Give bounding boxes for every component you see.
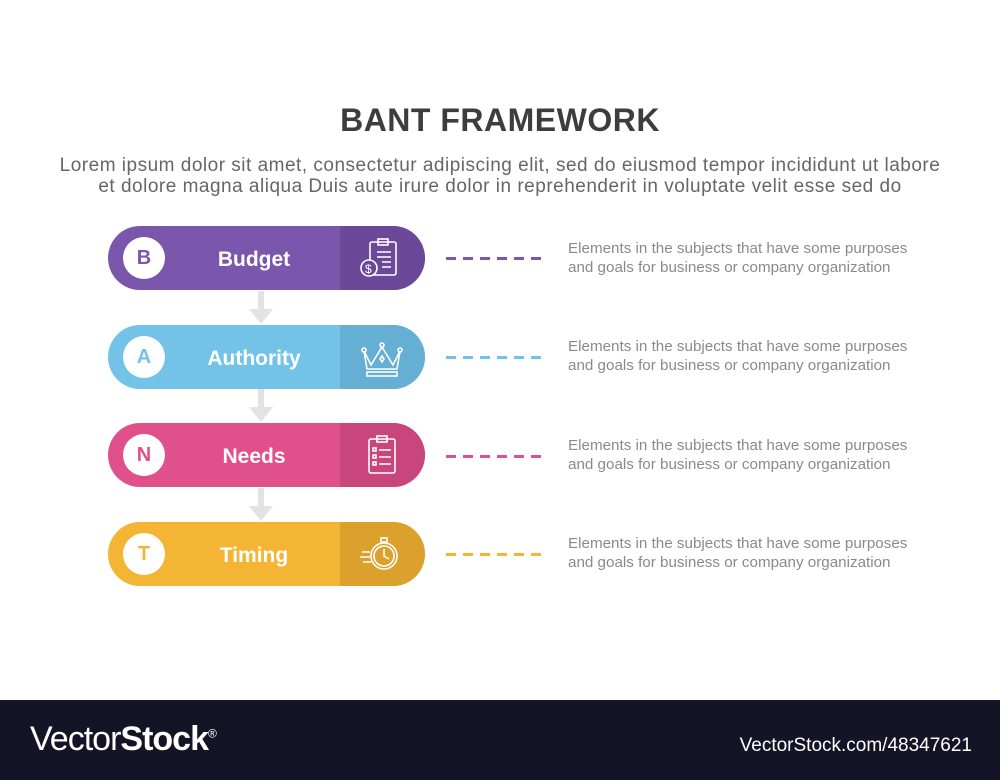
footer url: VectorStock.com/48347621: [740, 735, 972, 756]
description: timing: [568, 535, 907, 571]
footer bar: [0, 700, 1000, 780]
icon: crown: [340, 325, 425, 389]
pill: Timing: Timing: [220, 544, 288, 567]
description: authority: [568, 338, 907, 374]
pill: Needs: N: [137, 444, 151, 466]
title: BANT FRAMEWORK: [340, 102, 660, 138]
description: budget: and goals for business or company organization: [568, 259, 891, 276]
pill: Budget: B: [137, 247, 151, 269]
connector: needs: [446, 455, 541, 458]
description: budget: [568, 240, 907, 276]
icon: checklist: [340, 423, 425, 487]
pill: Timing: [108, 522, 425, 586]
footer logo: VectorStock®: [30, 720, 216, 758]
icon: budget clipboard: [340, 226, 425, 290]
description: authority: and goals for business or company organization: [568, 357, 891, 374]
pill: Authority: Authority: [207, 347, 301, 370]
icon: budget clipboard: $: [365, 262, 372, 276]
description: needs: Elements in the subjects that have some purposes: [568, 437, 907, 454]
pill: Timing: T: [138, 543, 150, 565]
pill: Budget: Budget: [218, 248, 290, 271]
pill: Needs: Needs: [222, 445, 286, 468]
pill: Authority: [108, 325, 425, 389]
connector: authority: [446, 356, 541, 359]
description: budget: Elements in the subjects that have some purposes: [568, 240, 907, 257]
arrow: N to T: [249, 488, 273, 521]
subtitle: et dolore magna aliqua Duis aute irure dolor in reprehenderit in voluptate velit esse sed do: [98, 176, 902, 197]
subtitle: Lorem ipsum dolor sit amet, consectetur adipiscing elit, sed do eiusmod tempor incididunt ut labore: [60, 155, 940, 176]
pill: Budget: [108, 226, 425, 290]
description: timing: and goals for business or company organization: [568, 554, 891, 571]
arrow: A to N: [249, 389, 273, 422]
description: needs: [568, 437, 907, 473]
pill: Authority: A: [137, 346, 151, 368]
description: authority: Elements in the subjects that have some purposes: [568, 338, 907, 355]
arrow: B to A: [249, 291, 273, 324]
connector: budget: [446, 257, 541, 260]
subtitle: [60, 155, 940, 197]
description: timing: Elements in the subjects that have some purposes: [568, 535, 907, 552]
description: needs: and goals for business or company organization: [568, 456, 891, 473]
pill: Needs: [108, 423, 425, 487]
connector: timing: [446, 553, 541, 556]
icon: stopwatch: [340, 522, 425, 586]
